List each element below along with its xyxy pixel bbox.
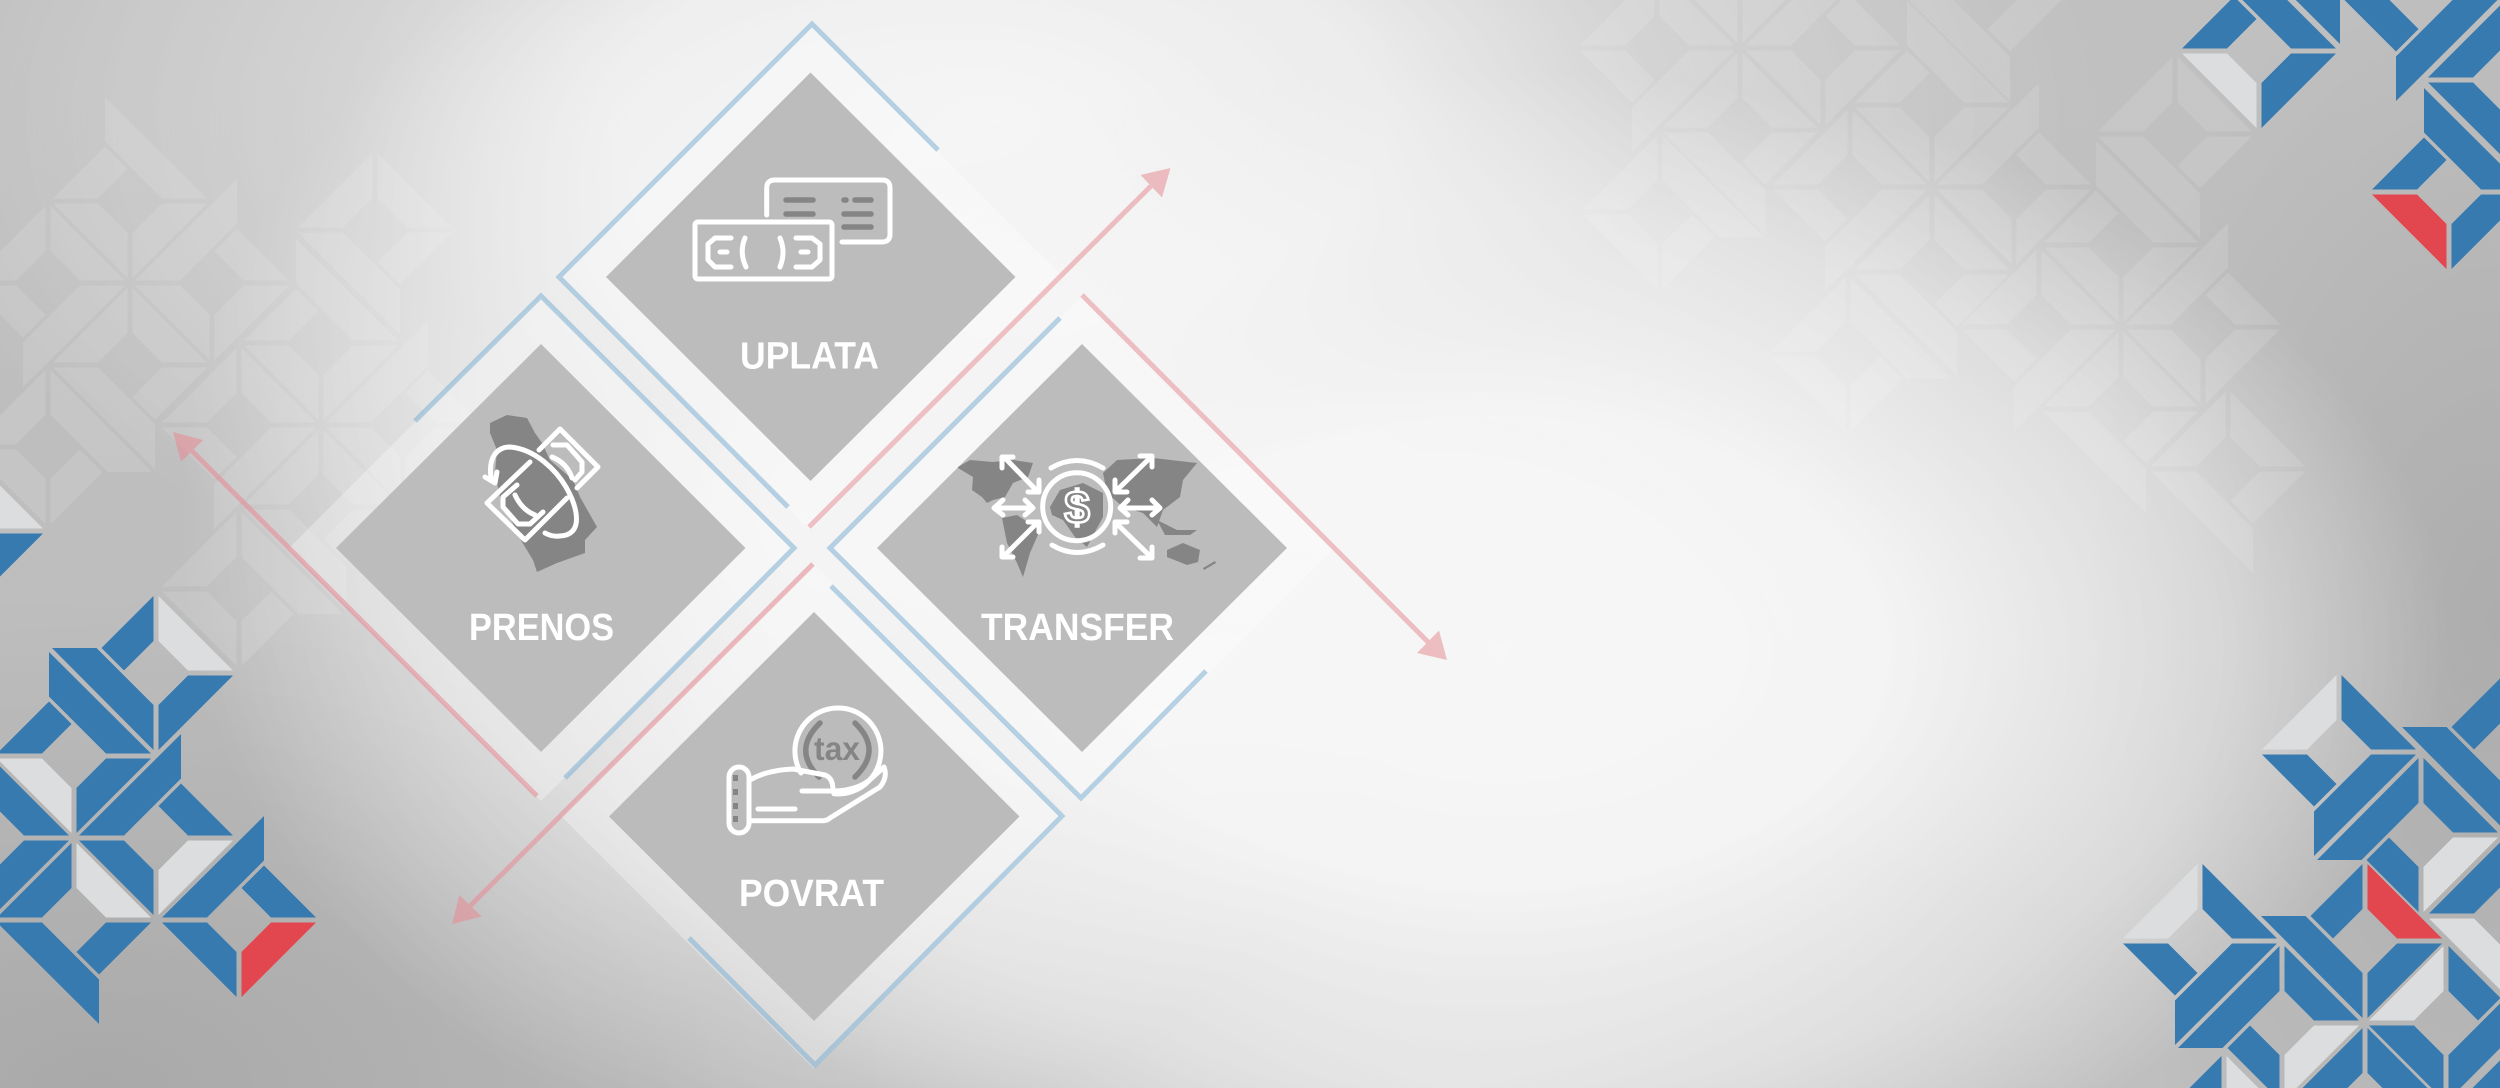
label: transfer: TRANSFER — [981, 607, 1174, 649]
icon: world map with money flows — [958, 456, 1216, 577]
arrow: bottom left — [452, 564, 813, 924]
icon: map with rotating banknote — [485, 415, 598, 572]
outline: prenos — [415, 296, 794, 778]
icon: banknote and card — [695, 180, 890, 279]
panel: uplata — [606, 72, 1016, 481]
label: prenos: PRENOS — [469, 607, 614, 649]
panel: transfer — [877, 344, 1287, 752]
label: povrat: POVRAT — [739, 873, 884, 915]
panel: povrat — [609, 612, 1020, 1021]
outline: transfer — [830, 318, 1206, 798]
icon: hand holding tax coin: tax — [814, 730, 861, 767]
arrow: upper left — [173, 432, 537, 796]
outline: uplata — [559, 24, 938, 507]
pattern: bottom-left corner — [0, 454, 316, 1024]
label: uplata: UPLATA — [740, 336, 879, 378]
arrow: top right — [809, 168, 1170, 527]
outline: povrat — [689, 586, 1062, 1065]
arrow: right — [1082, 295, 1447, 660]
pattern: top-right corner — [2182, 0, 2500, 269]
panel: prenos — [336, 344, 746, 752]
icon: world map with money flows: $ — [1064, 481, 1090, 533]
icon: hand holding tax coin — [729, 708, 885, 833]
diamond halos — [289, 25, 1334, 1069]
pattern: bottom-right corner — [2123, 675, 2500, 1088]
